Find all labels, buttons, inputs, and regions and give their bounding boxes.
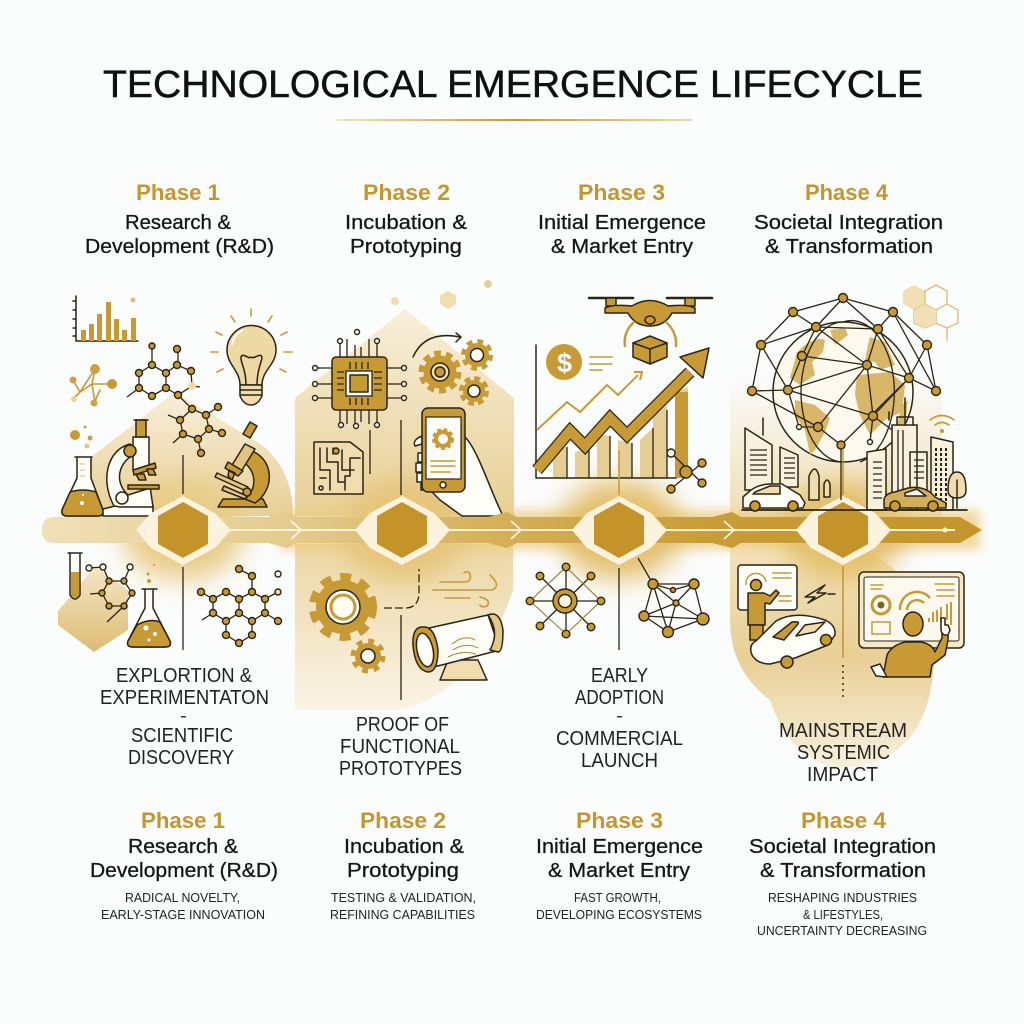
phase 1 lower molecule [86, 564, 135, 622]
top headings [85, 180, 943, 258]
middle labels: MAINSTREAM [779, 720, 907, 742]
phase 1 marker hexagon [136, 496, 231, 565]
phase 4 dashboard icon [859, 572, 964, 648]
bottom phase 4 summary: Societal Integration [749, 836, 936, 858]
bottom phase 1 summary: Phase 1 [141, 808, 225, 833]
bottom phase 2 summary [330, 808, 476, 922]
middle labels: IMPACT [807, 764, 878, 786]
bottom phase 2 summary: TESTING & VALIDATION, [331, 890, 476, 905]
phase 1 gold microscope [215, 422, 269, 507]
title: TECHNOLOGICAL EMERGENCE LIFECYCLE [103, 64, 923, 106]
phase 1 molecules [127, 343, 226, 456]
bottom phase 3 summary: DEVELOPING ECOSYSTEMS [536, 907, 702, 922]
phase 1 small gold molecule [70, 364, 117, 448]
middle labels: SYSTEMIC [797, 742, 890, 764]
phase 2 wind lines icon [433, 572, 497, 607]
phase 4 presenter icon [738, 565, 835, 640]
phase 3 radial network icon [526, 563, 605, 638]
bottom phase 4 summary: Phase 4 [801, 808, 887, 833]
title underline [337, 119, 692, 121]
top headings: Incubation & [345, 212, 468, 234]
progress bar [42, 512, 982, 548]
phase 2 marker hexagon [355, 496, 450, 565]
middle labels: FUNCTIONAL [340, 736, 460, 758]
top headings: Development (R&D) [85, 236, 274, 258]
top headings: Phase 4 [805, 180, 889, 205]
background shapes [58, 309, 942, 768]
bottom phase 2 summary: Incubation & [344, 836, 465, 858]
middle labels: SCIENTIFIC [131, 725, 233, 747]
bottom phase 1 summary: Development (R&D) [90, 860, 278, 882]
top headings: Initial Emergence [538, 212, 706, 234]
phase 1 large molecule [198, 566, 282, 646]
bottom phase 3 summary: & Market Entry [548, 860, 690, 882]
phase 1 flask icon [62, 457, 103, 516]
middle labels: ADOPTION [575, 687, 664, 709]
middle labels: PROOF OF [356, 714, 449, 736]
flying hexagons and dots [391, 280, 492, 309]
phase 2 circuit board icon [314, 442, 363, 494]
phase 3 growth chart [536, 344, 709, 478]
bottom phase 4 summary: & Transformation [760, 860, 926, 882]
middle labels: DISCOVERY [128, 747, 234, 769]
bottom phase 3 summary: Phase 3 [576, 808, 663, 833]
middle labels: EARLY [591, 665, 648, 687]
phase 4 marker hexagon [796, 496, 891, 565]
phase 4 electric car [751, 615, 835, 668]
phase 1 bar chart icon [73, 296, 138, 341]
bottom phase 3 summary: Initial Emergence [536, 836, 703, 858]
top headings: Prototyping [350, 236, 462, 258]
phase 4 city skyline icon [742, 398, 967, 510]
bottom phase 3 summary [536, 808, 703, 922]
middle labels: EXPERIMENTATON [100, 687, 269, 709]
phase 3 connector line [619, 450, 653, 650]
phase 1 test tube icon [68, 553, 82, 599]
bottom phase 1 summary: Research & [128, 836, 239, 858]
bottom phase 1 summary: EARLY-STAGE INNOVATION [101, 907, 265, 922]
phase 1 lower flask icon [128, 564, 170, 647]
phase 4 globe network icon [748, 294, 940, 500]
top headings: Phase 1 [136, 180, 220, 205]
phase 3 node cluster icon [667, 449, 706, 493]
bottom phase 3 summary: FAST GROWTH, [574, 890, 661, 905]
phase 4 analyst figure [871, 612, 950, 677]
top headings: & Market Entry [551, 236, 693, 258]
honeycomb icon [903, 285, 958, 341]
phase 2 phone in hand icon [414, 408, 503, 516]
middle labels [100, 665, 907, 786]
top headings: Research & [125, 212, 232, 234]
bottom phase 4 summary: RESHAPING INDUSTRIES [768, 890, 917, 905]
bottom phase 2 summary: Phase 2 [360, 808, 446, 833]
phase 2 large gears icon [314, 569, 419, 700]
phase 4 gold car [884, 487, 946, 511]
phase 3 growth chart: $ [557, 348, 572, 378]
middle labels: PROTOTYPES [339, 758, 462, 780]
phase 4 connector line [842, 450, 844, 700]
phase 1 connector lines [182, 455, 184, 650]
middle labels: COMMERCIAL [556, 728, 683, 750]
phase 2 wind tunnel icon [413, 614, 503, 680]
top headings: Phase 3 [578, 180, 665, 205]
top headings: Societal Integration [754, 212, 943, 234]
bottom phase 4 summary: & LIFESTYLES, [803, 907, 883, 922]
phase 2 gears icon [413, 333, 490, 403]
bottom phase 2 summary: REFINING CAPABILITIES [330, 907, 475, 922]
middle labels: LAUNCH [581, 750, 658, 772]
phase 3 mesh network icon [639, 579, 709, 638]
phase 3 marker hexagon [572, 496, 667, 565]
phase 2 chip icon [312, 330, 406, 428]
top headings: & Transformation [765, 236, 933, 258]
phase 2 vertical guide lines [370, 420, 401, 495]
bottom phase 4 summary [749, 808, 936, 938]
middle labels: EXPLORTION & [116, 665, 253, 687]
bottom phase 1 summary [90, 808, 278, 922]
phase 1 white microscope [103, 420, 159, 516]
phase 4 white car [743, 484, 805, 511]
bottom phase 1 summary: RADICAL NOVELTY, [125, 890, 240, 905]
phase 3 drone icon [589, 298, 712, 364]
gold glow behind hexagons and bar [121, 480, 980, 580]
bottom phase 2 summary: Prototyping [347, 860, 459, 882]
top headings: Phase 2 [363, 180, 450, 205]
phase 1 light bulb icon [211, 309, 292, 405]
bottom phase 4 summary: UNCERTAINTY DECREASING [757, 923, 927, 938]
